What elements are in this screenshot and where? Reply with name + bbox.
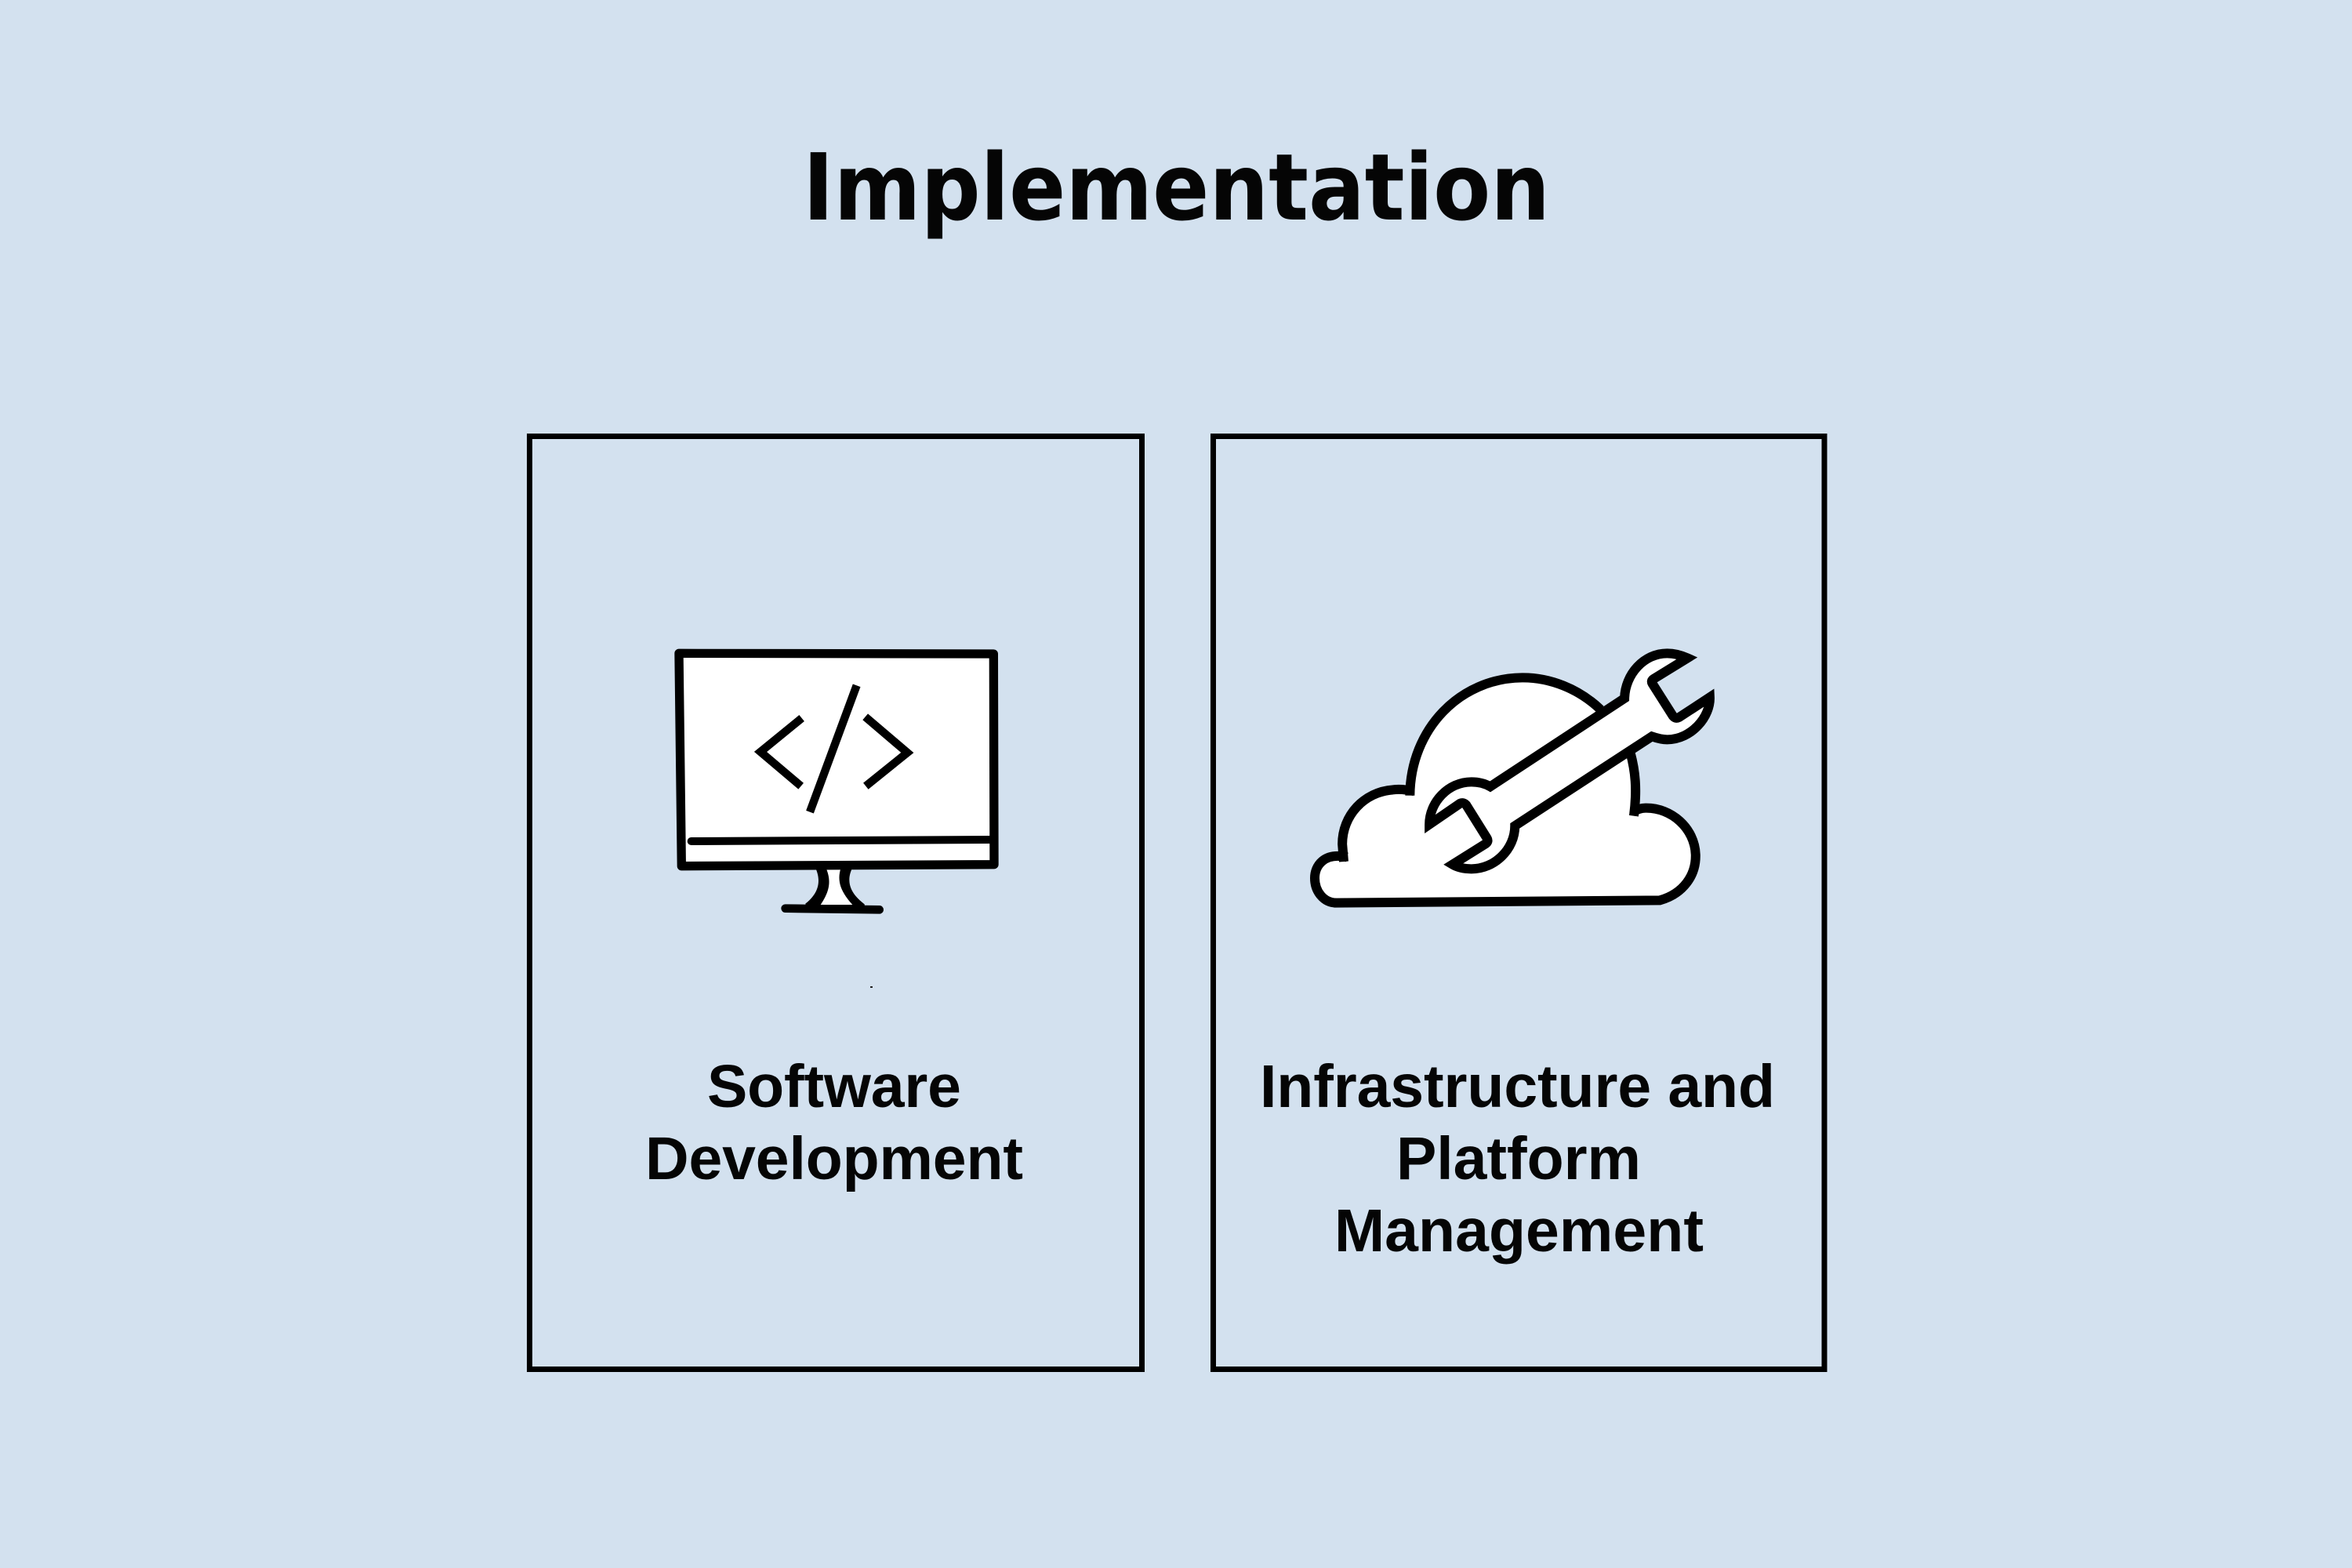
label: software development: Development [645,1125,1023,1192]
panel border [530,436,1142,1369]
panel: infrastructure and platform management [1214,436,1824,1369]
speck [870,986,873,988]
panel: software development [530,436,1142,1369]
title: Implementation [803,133,1550,241]
label: infrastructure and platform management: Platform [1396,1125,1641,1192]
wrench [1429,653,1710,869]
label: software development: Software [707,1053,961,1120]
cloud outline [1315,677,1696,903]
icon: cloud with wrench [1315,653,1710,903]
icon: monitor with code symbol [679,653,994,909]
cloud fill [1315,677,1696,903]
label: infrastructure and platform management: Infrastructure and [1260,1053,1775,1120]
label: infrastructure and platform management: Management [1334,1197,1704,1265]
panel border [1214,436,1824,1369]
